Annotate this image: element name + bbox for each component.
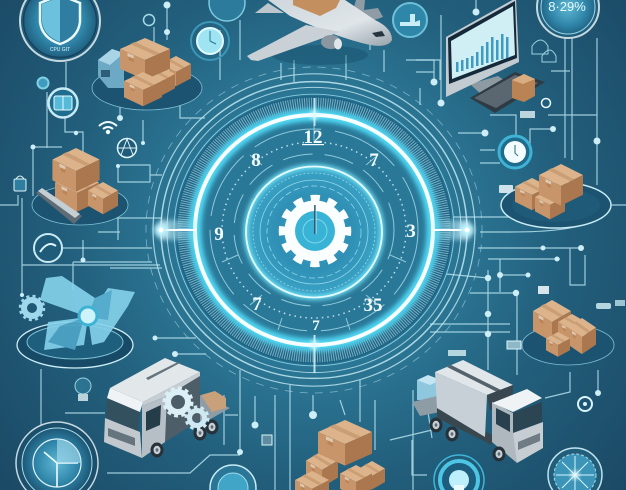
windshield xyxy=(106,398,140,432)
cargo end xyxy=(487,385,513,410)
parcels top left xyxy=(92,38,202,110)
screen xyxy=(448,1,517,84)
box on bed xyxy=(201,391,226,412)
icon: stopwatch dial bottom left xyxy=(16,422,98,490)
chassis xyxy=(437,408,492,445)
conveyor xyxy=(36,188,82,224)
base platform xyxy=(17,322,133,368)
inner ring xyxy=(246,166,382,298)
fuselage xyxy=(268,0,392,46)
icon: top ring center xyxy=(209,0,245,21)
icon: shield badge xyxy=(20,0,100,61)
platform xyxy=(32,185,128,225)
cab front xyxy=(104,418,142,458)
icon: wifi xyxy=(99,122,117,133)
hologram blades xyxy=(40,276,135,350)
platform xyxy=(92,66,202,110)
wheels rear xyxy=(430,418,442,432)
icon: compass dial bottom right xyxy=(548,448,602,490)
icon: top clock ring xyxy=(191,22,229,60)
computer monitor xyxy=(446,0,545,113)
dial face xyxy=(195,115,433,345)
cargo top xyxy=(435,360,513,395)
face segment arcs xyxy=(210,126,418,331)
small gear xyxy=(20,296,44,320)
clock numerals: 7 xyxy=(252,294,262,315)
cargo side xyxy=(165,374,200,442)
parcels lower right xyxy=(522,300,614,365)
cab top xyxy=(492,389,542,412)
parcels on conveyor left xyxy=(32,148,128,225)
icon: factory dial xyxy=(393,3,427,37)
box by keyboard xyxy=(512,74,535,102)
far wing xyxy=(255,3,284,13)
cab side xyxy=(492,402,517,463)
icon: circular graph node xyxy=(34,234,62,262)
icon: top ring node xyxy=(144,14,154,26)
clock numerals: 3 xyxy=(406,221,416,242)
parcels bottom center xyxy=(295,420,385,490)
dial outer rings xyxy=(146,67,482,393)
hub xyxy=(79,307,97,325)
icon: tablet node xyxy=(48,88,78,118)
clock dial xyxy=(146,67,482,393)
icon: light bulb xyxy=(75,378,91,401)
cargo on truck xyxy=(417,375,441,400)
truck top xyxy=(110,358,200,402)
blue machine xyxy=(98,49,124,88)
engine xyxy=(321,35,342,50)
clock numerals xyxy=(214,127,416,334)
flatbed xyxy=(200,395,230,425)
windshield xyxy=(513,402,542,433)
icon: percentage gauge xyxy=(537,0,599,38)
icon: hex nut xyxy=(578,397,592,411)
icon: label chips xyxy=(262,111,625,445)
cab front xyxy=(513,422,543,463)
right flare xyxy=(433,220,474,240)
outer glow of main ring xyxy=(195,115,433,345)
inner disc xyxy=(246,166,382,298)
clock numerals: 8 xyxy=(251,150,261,171)
top and bottom sparks xyxy=(310,98,318,373)
hologram gear machine xyxy=(17,276,135,368)
tail fin xyxy=(352,0,383,22)
cab side xyxy=(142,396,167,458)
monitor body xyxy=(446,0,519,97)
inner ring glow xyxy=(246,166,382,298)
icon: small house badges xyxy=(532,40,556,62)
icon: right clock xyxy=(499,136,531,168)
cockpit xyxy=(372,31,385,37)
screen bar chart xyxy=(456,34,508,72)
keyboard xyxy=(470,72,545,113)
main ring xyxy=(195,115,433,345)
gear xyxy=(282,198,348,264)
clock numerals: 12 xyxy=(304,127,322,148)
flatbed xyxy=(412,396,440,416)
platform xyxy=(522,325,614,365)
icon: globe xyxy=(118,138,136,158)
truck right xyxy=(412,360,543,463)
icon: shield badge: CPU GIT xyxy=(50,47,70,53)
tick band xyxy=(184,104,444,356)
parcels right xyxy=(501,164,611,228)
cargo side xyxy=(435,372,487,437)
gears on truck xyxy=(164,388,208,429)
cab roof edge xyxy=(107,388,143,412)
plane shadow xyxy=(272,45,368,65)
icon: lock xyxy=(14,176,26,191)
icon: ring node xyxy=(38,78,48,88)
icon: small ring bottom xyxy=(210,465,256,490)
clock numerals: 7 xyxy=(369,150,379,171)
airplane xyxy=(247,0,392,65)
left flare xyxy=(154,220,196,240)
clock numerals: 7 xyxy=(312,318,320,334)
clock numerals: 9 xyxy=(214,224,224,245)
icon: glowing person badge xyxy=(434,455,484,490)
cargo box on plane xyxy=(293,0,340,16)
near wing xyxy=(247,25,340,61)
platform xyxy=(501,182,611,228)
clock numerals: 35 xyxy=(364,295,382,316)
inner detail rings xyxy=(253,173,375,291)
icon: top-right ring node xyxy=(542,98,550,108)
truck left xyxy=(104,358,230,458)
